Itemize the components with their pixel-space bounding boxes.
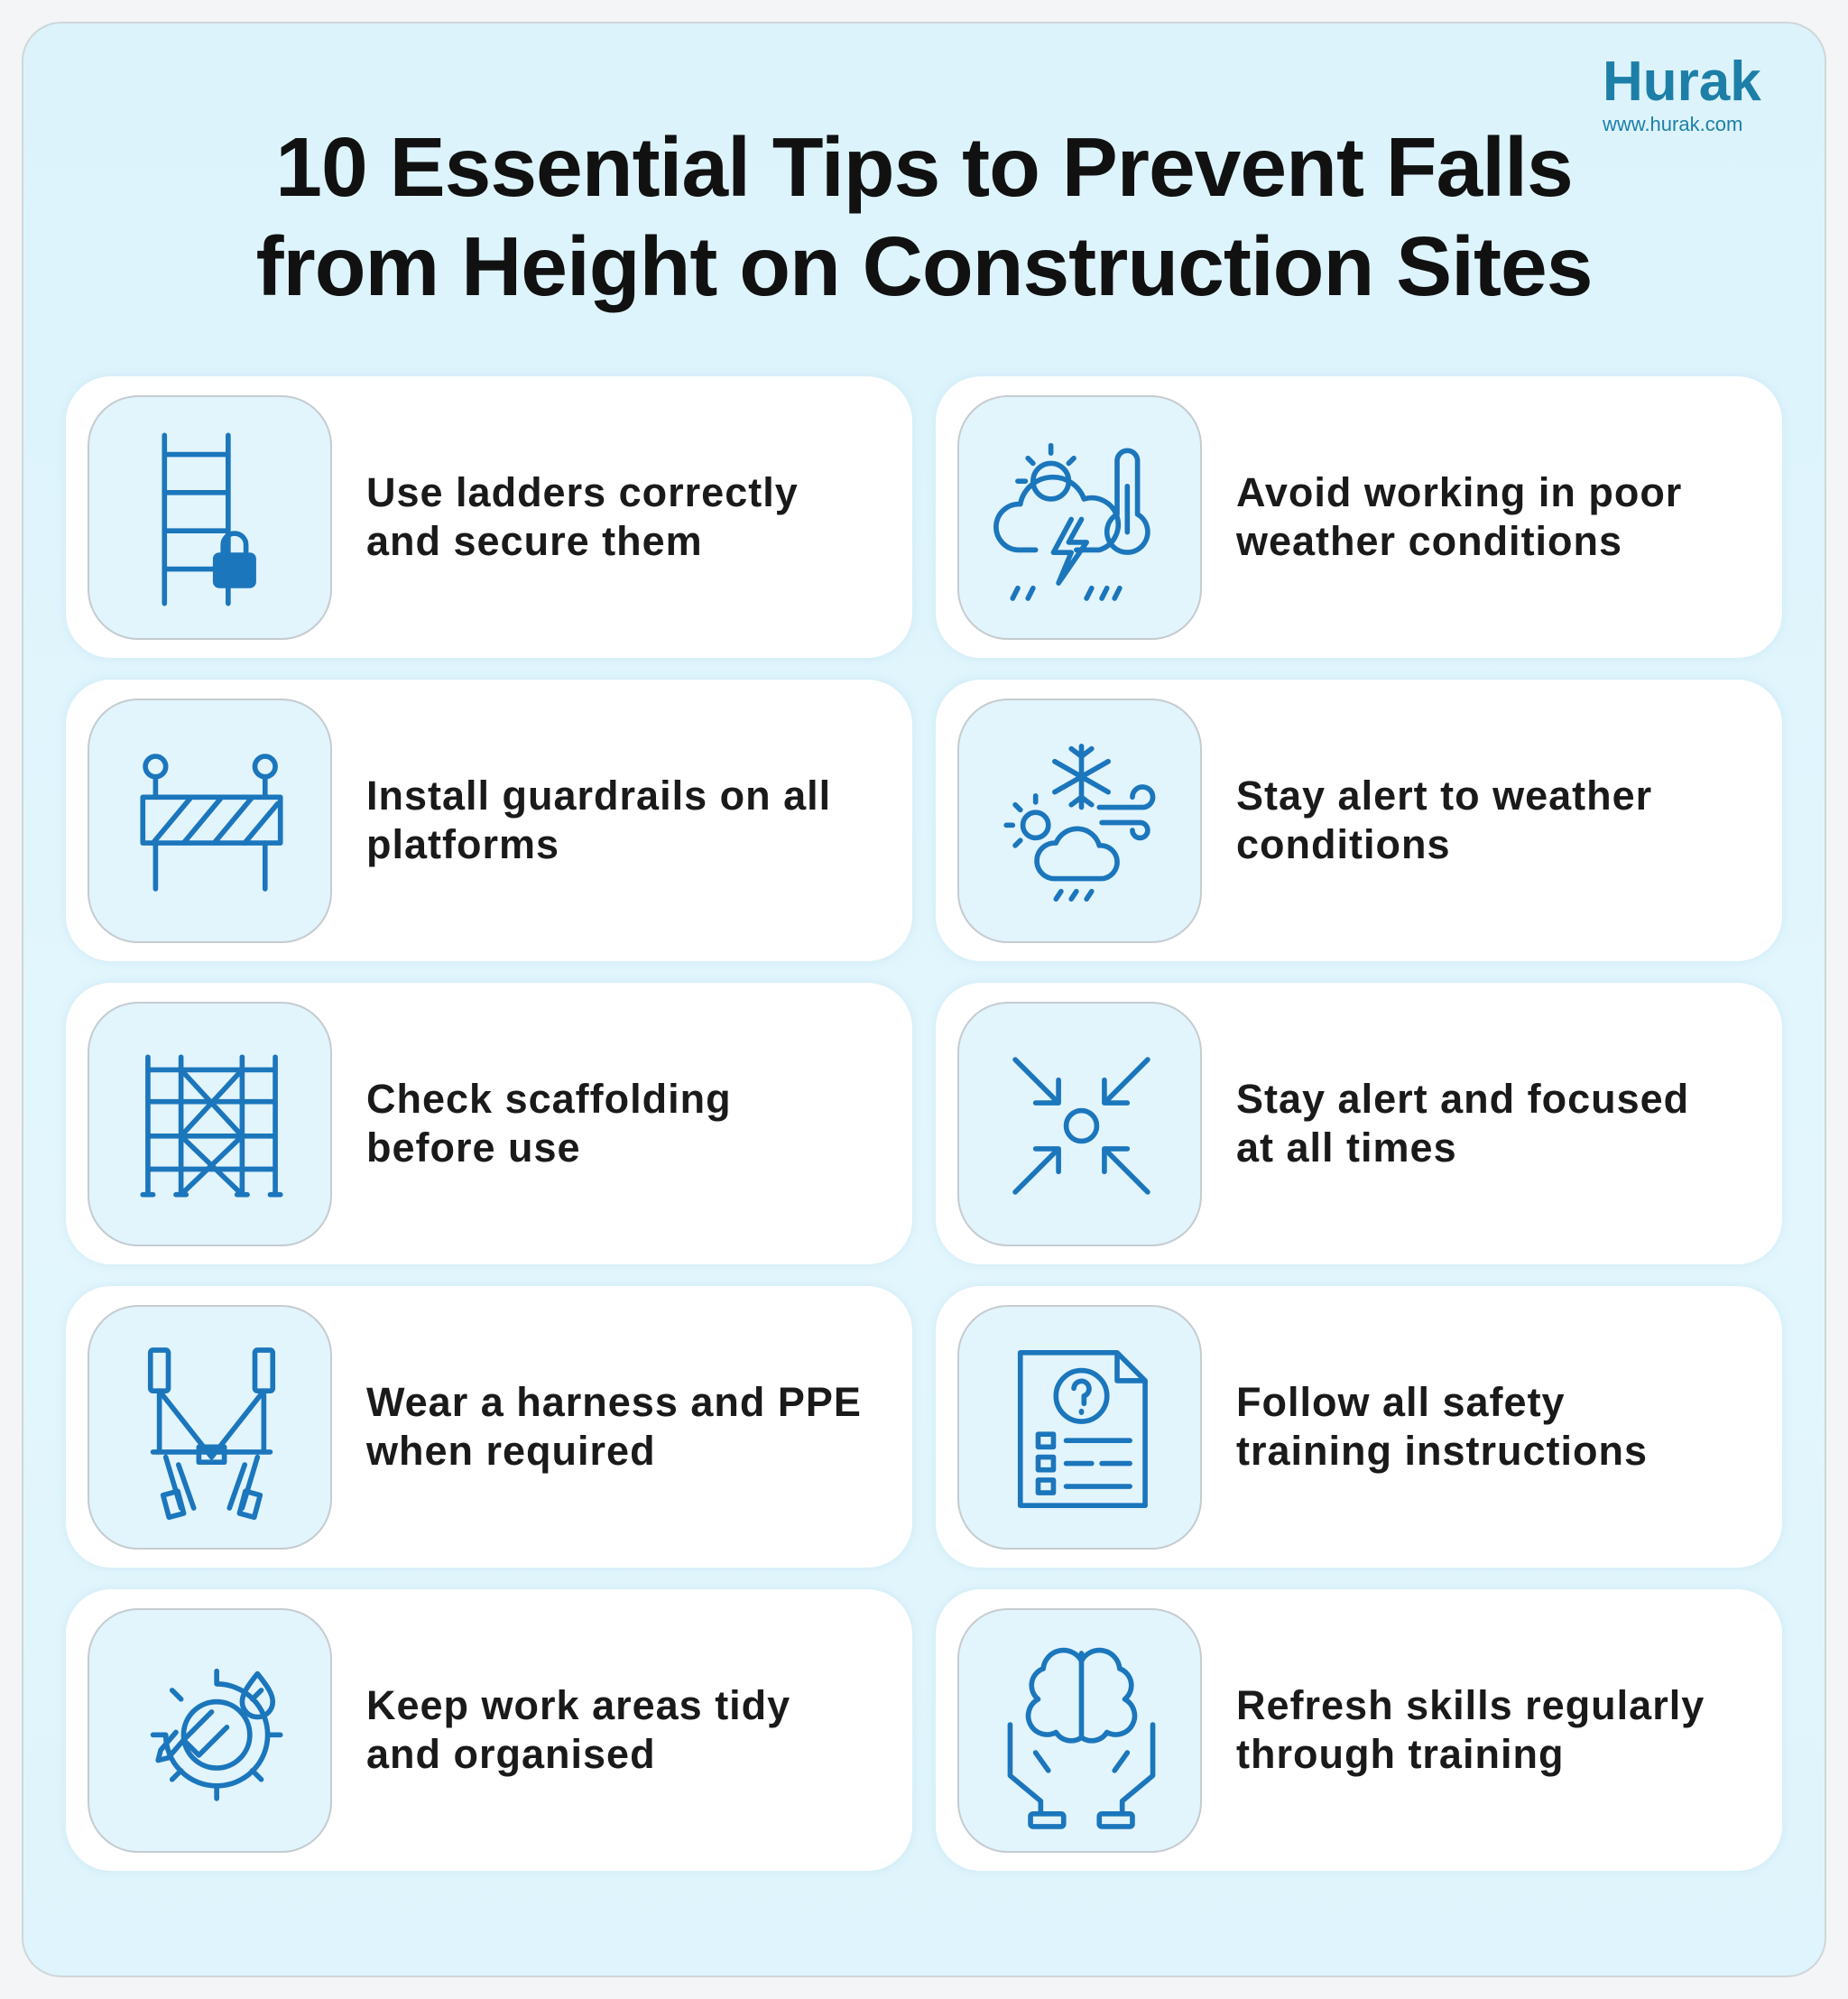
- icon: hands brain: [957, 1608, 1202, 1853]
- text: Avoid working in poor: [1236, 469, 1682, 515]
- text: and secure them: [366, 518, 703, 564]
- text: platforms: [366, 821, 559, 867]
- card: harness: [66, 1286, 912, 1568]
- icon: gear and drop: [88, 1608, 332, 1853]
- text: [366, 1682, 790, 1777]
- text: Wear a harness and PPE: [366, 1379, 862, 1425]
- icon: weather: [957, 395, 1202, 640]
- text: before use: [366, 1124, 581, 1171]
- text: [1236, 1379, 1648, 1474]
- icon: ladder: [88, 395, 332, 640]
- icon: harness: [88, 1305, 332, 1550]
- card: tidy: [66, 1589, 912, 1871]
- title: [256, 120, 1592, 313]
- text: [366, 1379, 862, 1474]
- card: guardrails: [66, 680, 912, 961]
- text: [1236, 773, 1652, 867]
- icon: document: [957, 1305, 1202, 1550]
- text: Follow all safety: [1236, 1379, 1566, 1425]
- icon: scaffold: [88, 1002, 332, 1246]
- text: Check scaffolding: [366, 1076, 732, 1122]
- text: Install guardrails on all: [366, 773, 831, 819]
- icon: snow sun wind: [957, 699, 1202, 943]
- text: Stay alert to weather: [1236, 773, 1652, 819]
- icon: focus arrows: [957, 1002, 1202, 1246]
- text: Use ladders correctly: [366, 469, 799, 515]
- text: [1236, 1076, 1689, 1171]
- card: stay alert weather: [936, 680, 1782, 961]
- text: Keep work areas tidy: [366, 1682, 790, 1728]
- card: refresh skills: [936, 1589, 1782, 1871]
- text: [366, 773, 831, 867]
- text: and organised: [366, 1731, 656, 1777]
- text: [366, 469, 799, 564]
- card: focused: [936, 983, 1782, 1264]
- text: Stay alert and focused: [1236, 1076, 1689, 1122]
- text: when required: [366, 1428, 656, 1474]
- card: training instructions: [936, 1286, 1782, 1568]
- text: [1236, 469, 1682, 564]
- text: Refresh skills regularly: [1236, 1682, 1705, 1728]
- logo: www.hurak.com: [1603, 113, 1742, 135]
- text: weather conditions: [1236, 518, 1622, 564]
- card: ladders: [66, 376, 912, 658]
- logo: Hurak: [1603, 51, 1761, 113]
- text: training instructions: [1236, 1428, 1648, 1474]
- text: through training: [1236, 1731, 1564, 1777]
- title: from Height on Construction Sites: [256, 219, 1592, 313]
- text: [1236, 1682, 1705, 1777]
- text: conditions: [1236, 821, 1450, 867]
- card: scaffolding: [66, 983, 912, 1264]
- text: at all times: [1236, 1124, 1457, 1171]
- icon: guardrail: [88, 699, 332, 943]
- card: weather: [936, 376, 1782, 658]
- text: [366, 1076, 732, 1171]
- title: 10 Essential Tips to Prevent Falls: [275, 120, 1573, 214]
